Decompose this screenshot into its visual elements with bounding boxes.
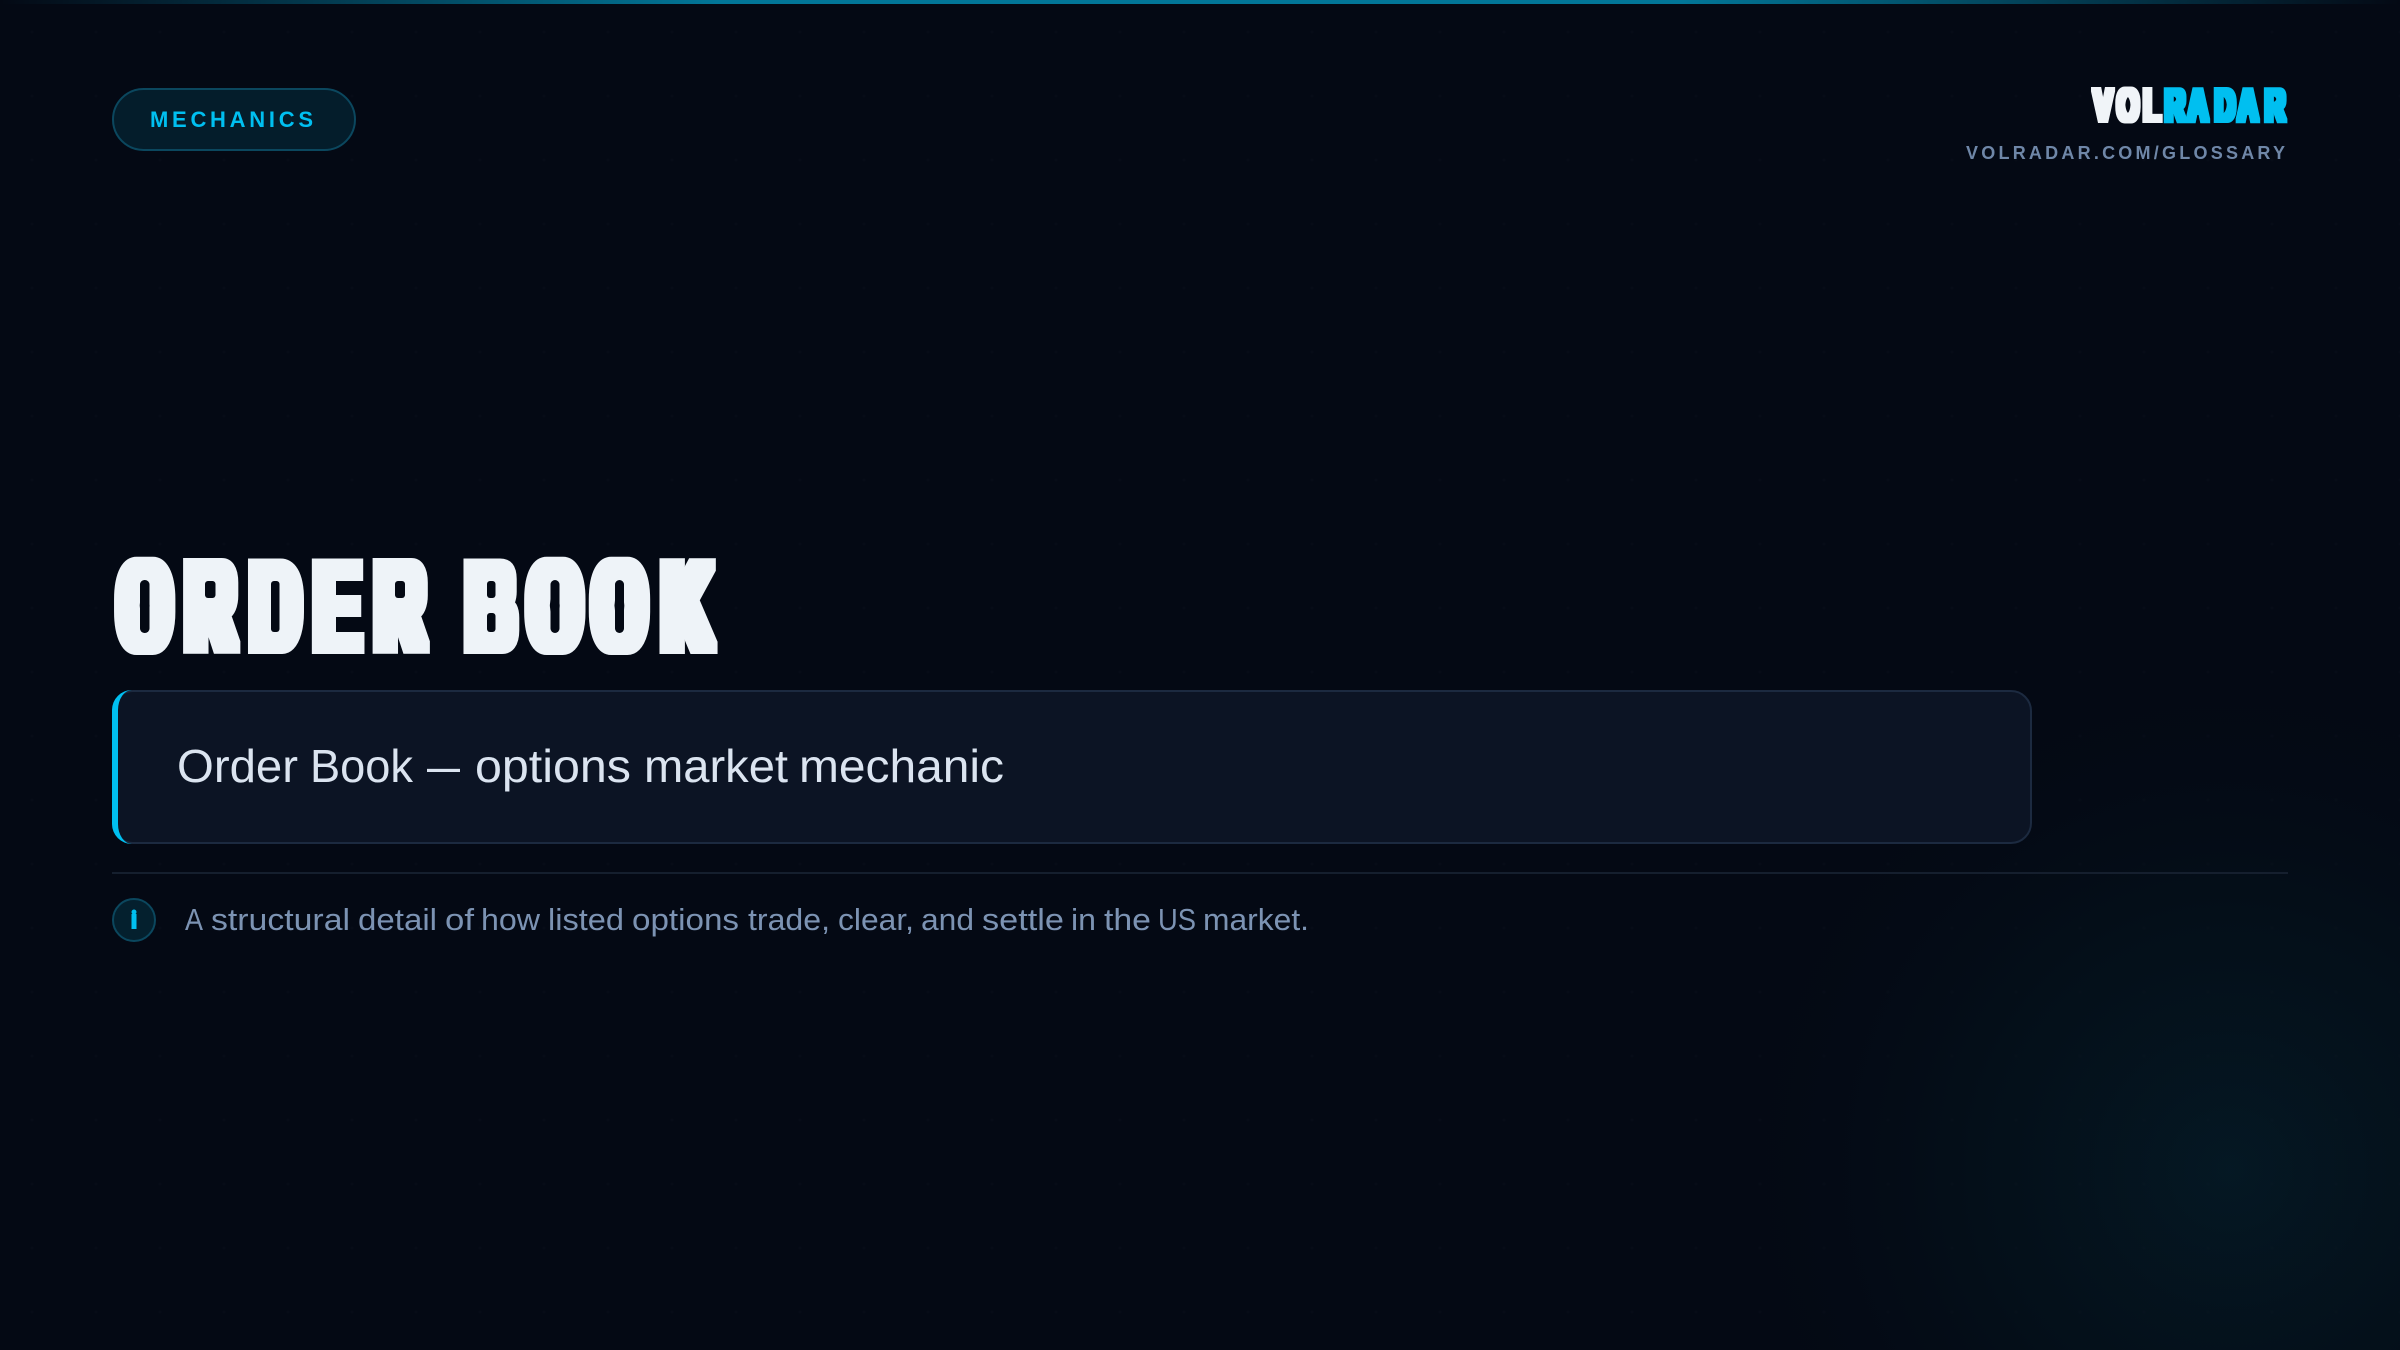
category pill: mechanics xyxy=(113,89,355,150)
note text: listed xyxy=(548,902,624,937)
title: ORDER BOOK xyxy=(119,537,710,674)
brand logo: VOL xyxy=(2094,80,2161,132)
note text: in xyxy=(1071,902,1096,937)
note text: US xyxy=(1158,902,1196,937)
category pill: mechanics: MECHANICS xyxy=(150,107,313,132)
divider xyxy=(112,872,2288,874)
note text: how xyxy=(481,902,541,937)
note text: market. xyxy=(1203,902,1309,937)
note text xyxy=(185,902,1309,937)
note text: options xyxy=(632,902,739,937)
note text: settle xyxy=(982,902,1064,937)
note text: and xyxy=(921,902,974,937)
note text: of xyxy=(445,902,474,937)
top accent bar xyxy=(0,0,2400,4)
brand logo: RADAR xyxy=(2165,80,2285,132)
definition card: market xyxy=(644,740,788,792)
note text: structural xyxy=(211,902,350,937)
definition card: Book xyxy=(310,740,414,792)
icon: info xyxy=(113,899,155,941)
note text: A xyxy=(185,902,203,937)
brand logo xyxy=(2094,80,2285,132)
note text: trade, xyxy=(748,902,830,937)
note text: the xyxy=(1104,902,1151,937)
definition card: options xyxy=(475,740,631,792)
definition card: Order xyxy=(177,740,298,792)
brand url: VOLRADAR.COM/GLOSSARY xyxy=(1966,143,2285,163)
definition card xyxy=(112,690,2031,844)
definition card: — xyxy=(427,740,460,792)
definition card: mechanic xyxy=(799,740,1004,792)
note text: clear, xyxy=(838,902,914,937)
note text: detail xyxy=(358,902,437,937)
